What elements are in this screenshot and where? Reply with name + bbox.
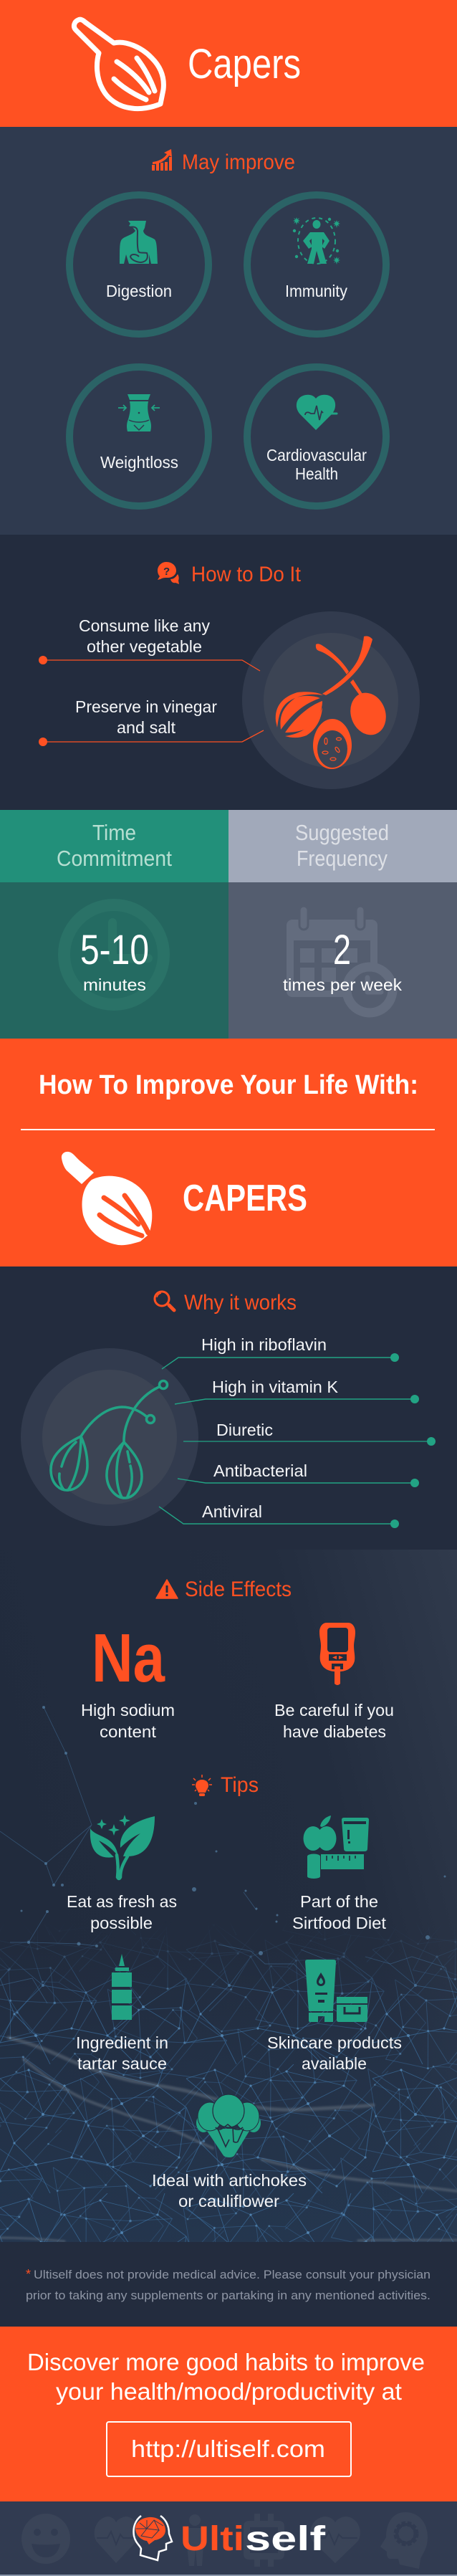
- heading: tips: Tips: [221, 1773, 259, 1797]
- title: capers: CAPERS: [183, 1178, 307, 1219]
- network background: [0, 1706, 457, 2242]
- item: antiviral: Antiviral: [202, 1502, 262, 1521]
- panel: how to do it: [0, 535, 457, 810]
- tip: artichokes or cauliflower: or cauliflower: [178, 2192, 279, 2210]
- heading: time commitment: Time: [92, 820, 136, 845]
- value: 2 times per week: times per week: [283, 975, 403, 994]
- capers illustration: [242, 611, 420, 789]
- ghost icons row: [21, 2512, 428, 2569]
- tip: skincare: Skincare products: [267, 2033, 402, 2052]
- label: immunity: Immunity: [285, 282, 347, 300]
- text: discover more: your health/mood/productivity at: [56, 2378, 402, 2405]
- benefit: digestion: [69, 195, 208, 334]
- icon: heart with pulse: [297, 395, 337, 430]
- panel: side effects and tips: [0, 1550, 457, 2242]
- icon: brain in head: [133, 2516, 172, 2560]
- icon: caper leaf outline: [74, 19, 163, 109]
- tip: skincare: available: [302, 2054, 367, 2073]
- icon: rising chart: [152, 149, 172, 171]
- icon: question bubbles: ?: [163, 566, 170, 578]
- item: diuretic: Diuretic: [216, 1421, 273, 1439]
- step: preserve: [39, 697, 264, 746]
- text: medical disclaimer: Ultiself does not provide medical advice. Please consult your physician: [34, 2269, 430, 2281]
- item: high in vitamin k: [175, 1378, 419, 1404]
- step: preserve: and salt: [117, 718, 176, 737]
- side effect: diabetes: have diabetes: [283, 1722, 386, 1741]
- icon: magnifier: [155, 1292, 174, 1310]
- benefit: cardiovascular health: [247, 367, 386, 506]
- panel: why it works: [0, 1266, 457, 1550]
- tip: skincare: [267, 1960, 402, 2073]
- item: antiviral: [159, 1502, 399, 1528]
- icon: cream tube and jar: [305, 1960, 367, 2022]
- panel: call to action: [0, 2327, 457, 2501]
- icon: ghost clock: [58, 899, 170, 1011]
- side effect: high sodium: Na: [92, 1620, 165, 1697]
- panel: header: [0, 0, 457, 127]
- benefit: immunity: [247, 195, 386, 334]
- tip: tartar sauce: tartar sauce: [77, 2054, 167, 2073]
- tip: artichokes or cauliflower: [152, 2094, 307, 2210]
- heading: side effects: Side Effects: [185, 1578, 292, 1601]
- label: digestion: Digestion: [106, 282, 172, 300]
- icon: glucose meter: [319, 1623, 355, 1685]
- side effect: diabetes: [274, 1623, 394, 1741]
- logo: ultiself: self: [245, 2520, 326, 2558]
- panel: time commitment: [0, 810, 228, 1039]
- caper stem illustration: [21, 1348, 198, 1526]
- step: preserve: Preserve in vinegar: [75, 697, 217, 716]
- heading: time commitment: Commitment: [57, 846, 172, 871]
- item: diuretic: [183, 1421, 436, 1446]
- icon: sauce bottle: [112, 1954, 132, 2020]
- label: weightloss: Weightloss: [100, 453, 178, 472]
- icon: protected person: [293, 217, 340, 264]
- panel: may improve: [0, 127, 457, 535]
- step: consume: [39, 616, 260, 671]
- title: Capers: [188, 41, 301, 87]
- label: cardiovascular health: Health: [295, 464, 338, 483]
- heading: suggested frequency: [295, 820, 389, 871]
- tip: tartar sauce: [76, 1954, 168, 2073]
- text: discover more: Discover more good habits to improve: [27, 2349, 425, 2375]
- text: discover more: [27, 2349, 425, 2405]
- icon: digestive system: [120, 221, 158, 264]
- side effect: diabetes: Be careful if you: [274, 1701, 394, 1719]
- icon: slim waist: [118, 394, 160, 431]
- step: consume: Consume like any: [79, 616, 210, 635]
- item: antibacterial: [178, 1461, 419, 1487]
- icon: caper leaf filled: [62, 1152, 152, 1245]
- logo: ultiself: Ulti: [181, 2520, 244, 2558]
- item: high in riboflavin: [162, 1335, 399, 1369]
- logo: ultiself: [133, 2516, 326, 2560]
- value: 5-10 minutes: minutes: [83, 975, 146, 994]
- tip: sirtfood diet: Part of the: [300, 1892, 378, 1911]
- tip: tartar sauce: Ingredient in: [76, 2033, 168, 2052]
- item: high in riboflavin: High in riboflavin: [201, 1335, 327, 1354]
- value: 2 times per week: 2: [333, 927, 351, 973]
- side effect: high sodium: [81, 1620, 175, 1741]
- panel: suggested frequency: [228, 810, 457, 1039]
- label: cardiovascular health: Cardiovascular: [266, 446, 367, 464]
- heading: how to improve your life with: How To Improve Your Life With:: [39, 1070, 418, 1100]
- panel: disclaimer: [0, 2242, 457, 2327]
- heading: suggested frequency: Suggested: [295, 820, 389, 845]
- tip: artichokes or cauliflower: Ideal with artichokes: [152, 2171, 307, 2190]
- icon: sprout with sparkles: [90, 1815, 155, 1879]
- icon: ghost calendar: [287, 906, 393, 1013]
- heading: may improve: May improve: [182, 151, 295, 174]
- text: medical disclaimer: *: [26, 2267, 31, 2281]
- text: medical disclaimer: prior to taking any supplements or partaking in any mentioned activities.: [26, 2289, 430, 2302]
- icon: broccoli: [196, 2094, 261, 2157]
- icon: question bubbles: [158, 562, 179, 584]
- label: cardiovascular health: [266, 446, 367, 483]
- icon: light bulb: [192, 1775, 212, 1796]
- value: 5-10 minutes: 5-10: [80, 927, 149, 973]
- panel: how to improve banner: [0, 1039, 457, 1266]
- icon: apple, glass and tape: [304, 1816, 369, 1879]
- item: high in vitamin k: High in vitamin K: [212, 1378, 339, 1396]
- tip: sirtfood diet: [292, 1816, 387, 1932]
- side effect: high sodium: High sodium: [81, 1701, 175, 1719]
- tip: eat fresh: Eat as fresh as: [67, 1892, 177, 1911]
- tip: eat fresh: [67, 1815, 177, 1932]
- tip: eat fresh: possible: [90, 1914, 153, 1932]
- tip: sirtfood diet: Sirtfood Diet: [292, 1914, 387, 1932]
- value: 2 times per week: [283, 927, 403, 994]
- heading: how to do it: How to Do It: [191, 563, 302, 586]
- button: website link: [107, 2422, 351, 2476]
- step: consume: other vegetable: [87, 637, 202, 656]
- icon: warning triangle: [156, 1580, 178, 1598]
- button: website link: http://ultiself.com: [131, 2436, 325, 2462]
- heading: time commitment: [57, 820, 172, 871]
- value: 5-10 minutes: [80, 927, 149, 994]
- item: antibacterial: Antibacterial: [213, 1461, 307, 1480]
- text: medical disclaimer: [26, 2267, 430, 2302]
- side effect: high sodium: content: [100, 1722, 157, 1741]
- heading: why it works: Why it works: [184, 1291, 297, 1315]
- benefit: weightloss: [69, 367, 208, 506]
- heading: suggested frequency: Frequency: [297, 846, 388, 871]
- panel: footer: [0, 2501, 457, 2576]
